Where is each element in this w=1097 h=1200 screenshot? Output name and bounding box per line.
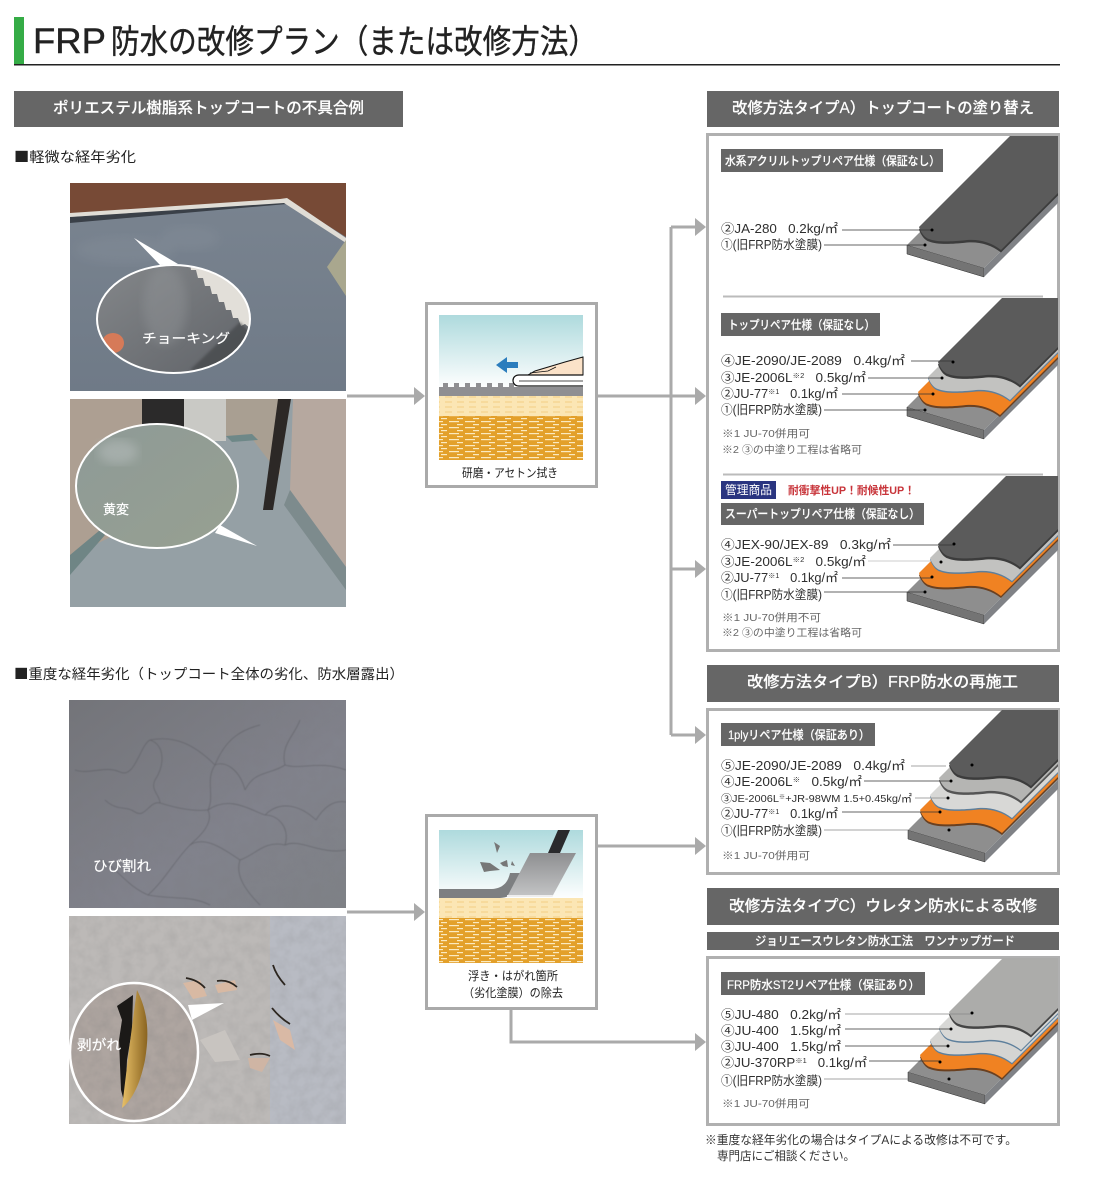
layer labels: +JR-98WM 1.5+0.45kg/㎡ [785, 793, 913, 805]
spec title: 水系アクリルトップリペア仕様（保証なし） [725, 153, 940, 168]
layer labels [721, 759, 974, 838]
layer labels: ①(旧FRP防水塗膜) [721, 823, 822, 838]
arrow: removal to type B [598, 837, 706, 855]
badge: managed product: 管理商品 [725, 482, 772, 497]
label: cracking: ひび割れ [93, 858, 151, 874]
spec: top repair [721, 298, 1058, 454]
magnified circle [70, 983, 198, 1123]
layer labels: ①(旧FRP防水塗膜) [721, 237, 822, 252]
layer labels: ※2 [792, 372, 804, 380]
footnotes: ※2 ③の中塗り工程は省略可 [722, 626, 862, 639]
layer labels: ②JU-77 [721, 387, 767, 401]
caption: （劣化塗膜）の除去 [463, 985, 563, 1000]
panel: type B [706, 708, 1060, 875]
layer labels: ④JEX-90/JEX-89 0.3kg/㎡ [721, 538, 892, 552]
spec title: トップリペア仕様（保証なし） [728, 317, 875, 332]
spec title [721, 313, 880, 336]
footnotes [722, 611, 862, 639]
layer labels: ①(旧FRP防水塗膜) [721, 587, 822, 602]
illustration: scraping [439, 830, 583, 963]
layer labels: 0.1kg/㎡ [779, 807, 838, 821]
layer labels: ⑤JU-480 0.2kg/㎡ [721, 1008, 842, 1022]
layer labels: 0.5kg/㎡ [804, 371, 867, 385]
heading: severe deterioration: ■重度な経年劣化（トップコート全体の劣化、防水層露出） [14, 664, 404, 684]
photo: peeling [69, 916, 346, 1124]
magnified circle [97, 262, 252, 373]
layer labels: ②JA-280 0.2kg/㎡ [721, 222, 839, 236]
callout pointer [188, 1003, 224, 1020]
badge: managed product [721, 481, 776, 499]
title: FRP [33, 22, 106, 61]
layer labels: ②JU-77 [721, 571, 767, 585]
magnified circle [76, 424, 238, 548]
layer labels: 0.5kg/㎡ [800, 775, 863, 789]
layer labels: ④JE-2006L [721, 775, 787, 789]
bottom note: ※重度な経年劣化の場合はタイプAによる改修は不可です。 [705, 1132, 1017, 1147]
layer labels: ③JU-400 1.5kg/㎡ [721, 1040, 842, 1054]
header: type C: 改修方法タイプC）ウレタン防水による改修 [729, 897, 1038, 915]
title accent bar [14, 17, 24, 65]
header: type B: 改修方法タイプB）FRP防水の再施工 [747, 673, 1018, 691]
layer labels: ※ [779, 794, 785, 801]
layer labels [721, 222, 934, 252]
layer labels: ①(旧FRP防水塗膜) [721, 402, 822, 417]
layer diagram [906, 298, 1058, 440]
subheader: urethane method [707, 932, 1059, 950]
icon: hand and cloth [513, 357, 583, 386]
footnote: ※1 JU-70併用可 [722, 849, 810, 862]
layer labels: 0.1kg/㎡ [779, 571, 838, 585]
layer labels: ※1 [768, 572, 779, 580]
arrow: removal to type C [511, 1010, 706, 1051]
layer labels: ②JU-370RP [721, 1056, 791, 1070]
icon: blue arrow [496, 357, 518, 373]
layer diagram [906, 476, 1058, 624]
left header: defect examples: ポリエステル樹脂系トップコートの不具合例 [53, 99, 364, 117]
layer labels [721, 538, 956, 602]
spec title [721, 723, 875, 746]
layer labels: ※ [793, 776, 800, 784]
label: chalking: チョーキング [142, 331, 230, 346]
spec title [721, 503, 924, 525]
caption: 浮き・はがれ箇所 [468, 968, 558, 983]
layer labels: ①(旧FRP防水塗膜) [721, 1073, 822, 1088]
bottom note: 専門店にご相談ください。 [717, 1148, 855, 1163]
panel: removal step [426, 816, 596, 1008]
footnotes: ※1 JU-70併用可 [722, 427, 810, 440]
layer labels: ※1 [768, 388, 779, 396]
layer labels: ※1 [795, 1057, 807, 1065]
footnotes: ※2 ③の中塗り工程は省略可 [722, 443, 862, 456]
footnotes: ※1 JU-70併用不可 [722, 611, 821, 624]
left header: defect examples [14, 91, 403, 127]
layer labels: 0.1kg/㎡ [807, 1056, 868, 1070]
layer labels: ※1 [768, 808, 779, 816]
photo: chalking [70, 183, 346, 391]
label: yellowing: 黄変 [103, 502, 129, 517]
arrow: chalking photos to sanding [347, 387, 425, 405]
spec: water-based acrylic top repair [721, 136, 1058, 278]
illustration: sanding [439, 315, 583, 460]
label: peeling: 剥がれ [77, 1037, 121, 1053]
spec title: スーパートップリペア仕様（保証なし） [725, 506, 920, 521]
spec title: FRP防水ST2リペア仕様（保証あり） [727, 977, 920, 992]
layer diagram [908, 710, 1058, 862]
layer labels: 0.5kg/㎡ [804, 555, 867, 569]
arrows: sanding to type A and B [598, 218, 706, 744]
layer labels [721, 354, 954, 417]
header: type B [707, 665, 1059, 702]
caption: 研磨・アセトン拭き [462, 466, 558, 480]
panel: sanding step [426, 304, 596, 486]
callout pointer [134, 238, 178, 265]
title rule [14, 64, 1060, 66]
footnote: ※1 JU-70併用可 [722, 1097, 810, 1110]
layer labels: ④JU-400 1.5kg/㎡ [721, 1024, 842, 1038]
spec title [721, 149, 943, 172]
title: 防水の改修プラン（または改修方法） [111, 23, 597, 60]
heading: minor deterioration: ■軽微な経年劣化 [14, 147, 136, 167]
panel: type A [706, 133, 1060, 652]
layer labels: ②JU-77 [721, 807, 767, 821]
photo: yellowing [70, 399, 346, 607]
layer labels: ④JE-2090/JE-2089 0.4kg/㎡ [721, 354, 906, 368]
header: type A [707, 91, 1059, 127]
bottom note [705, 1132, 1017, 1163]
photo: cracking [69, 700, 346, 908]
layer labels: ⑤JE-2090/JE-2089 0.4kg/㎡ [721, 759, 906, 773]
layer labels: ※2 [792, 556, 804, 564]
callout pointer [215, 525, 257, 546]
spec title: 1plyリペア仕様（保証あり） [728, 727, 870, 742]
subheader: urethane method: ジョリエースウレタン防水工法 ワンナップガード [755, 933, 1015, 948]
header: type A: 改修方法タイプA）トップコートの塗り替え [732, 99, 1034, 117]
panel: type C [706, 956, 1060, 1126]
layer diagram [908, 959, 1058, 1104]
layer labels: ③JE-2006L [721, 793, 776, 805]
spec: super top repair [721, 476, 1058, 638]
footnotes [722, 427, 862, 456]
title block [14, 17, 1060, 66]
layer labels: ③JE-2006L [721, 371, 787, 385]
layer labels: ③JE-2006L [721, 555, 787, 569]
layer diagram [906, 136, 1058, 278]
header: type C [707, 888, 1059, 925]
arrow: cracking photos to removal [347, 903, 425, 921]
highlight text: 耐衝撃性UP！耐候性UP！ [788, 483, 915, 497]
layer labels [721, 1008, 974, 1088]
layer labels: 0.1kg/㎡ [779, 387, 838, 401]
spec title [721, 972, 925, 995]
caption [463, 968, 563, 1000]
